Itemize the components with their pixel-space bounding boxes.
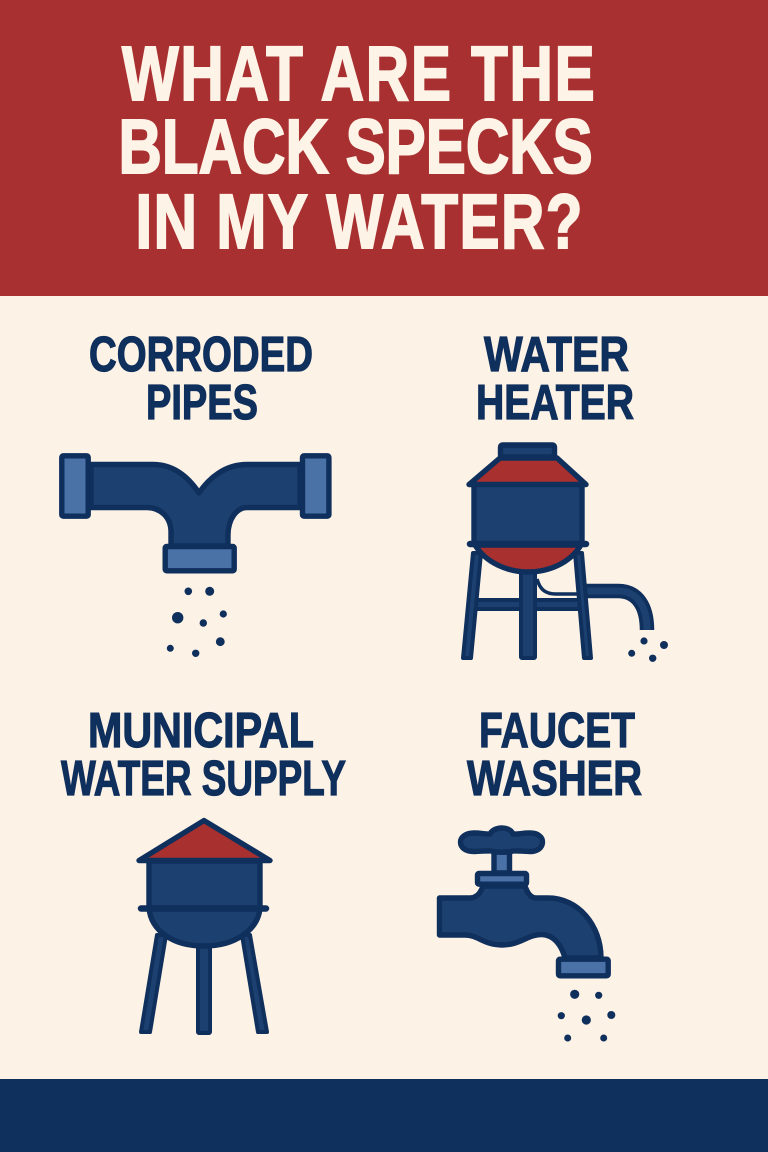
heading: corroded pipes: CORRODED [89,328,313,382]
heading: faucet washer [467,704,642,806]
footer band [0,1079,768,1152]
icon: faucet [440,828,608,976]
black specks from heater [628,637,668,662]
panel: municipal water supply [61,704,346,1033]
heading: corroded pipes: PIPES [146,376,258,430]
heading: faucet washer: WASHER [467,752,642,806]
title: IN MY WATER? [136,178,582,265]
title: BLACK SPECKS [118,103,593,190]
panel: corroded pipes [62,328,329,657]
black specks from faucet [558,990,615,1042]
heading: water heater [476,328,634,430]
black specks from pipe [167,587,227,657]
heading: water heater: HEATER [476,376,634,430]
heading: municipal water supply: MUNICIPAL [88,704,314,758]
icon: corroded Y pipe [62,456,329,571]
heading: municipal water supply [61,704,346,806]
icon: municipal water tower [139,820,270,1033]
heading: corroded pipes [89,328,313,430]
panel: water heater [463,328,668,662]
icon: water heater on stand [463,445,647,658]
title: WHAT ARE THE [122,30,595,117]
heading: water heater: WATER [484,328,629,382]
heading: municipal water supply: WATER SUPPLY [61,752,346,806]
panel: faucet washer [440,704,642,1042]
heading: faucet washer: FAUCET [479,704,635,758]
title [118,30,595,265]
header band [0,0,768,296]
